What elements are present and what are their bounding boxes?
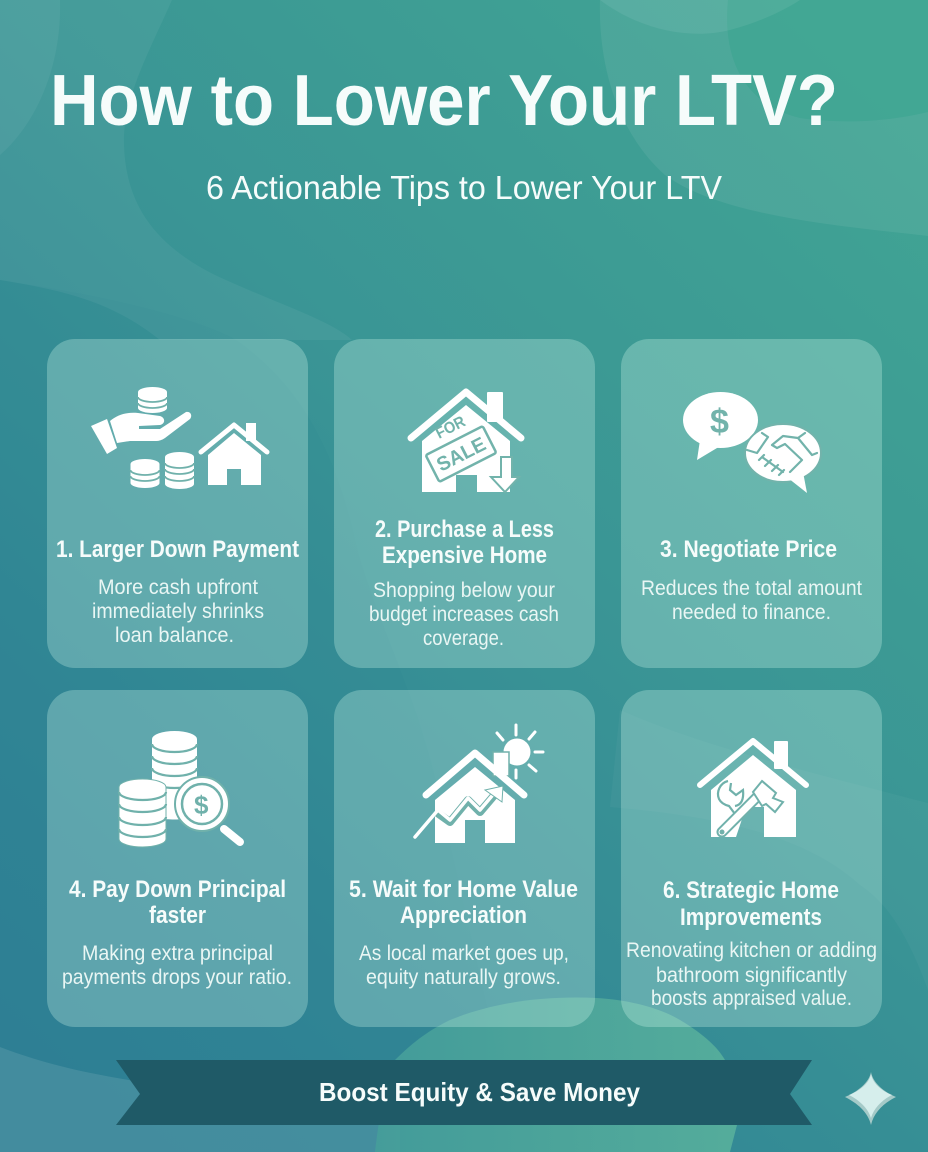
card title: 2. Purchase a Less	[375, 516, 554, 543]
card text: coverage.	[423, 627, 504, 650]
card text: Shopping below your	[373, 579, 555, 602]
card title: Expensive Home	[382, 542, 547, 569]
icon: for sale house with down arrow: FOR	[433, 413, 469, 443]
panel: 6 Strategic Home Improvements	[621, 690, 882, 1027]
card title	[349, 876, 578, 929]
card text: As local market goes up,	[359, 942, 569, 965]
icon: house with wrench and hammer	[700, 741, 806, 837]
card text: loan balance.	[115, 624, 234, 647]
card title: 1. Larger Down Payment	[56, 536, 299, 563]
card title: 4. Pay Down Principal	[69, 876, 286, 903]
icon: coin stacks with magnifier: $	[194, 790, 209, 820]
card text: Making extra principal	[82, 942, 273, 965]
card title: Appreciation	[400, 902, 527, 929]
card title: 6. Strategic Home	[663, 877, 839, 904]
icon: coin stacks with magnifier	[119, 731, 240, 847]
panel: 3 Negotiate Price	[621, 339, 882, 668]
banner text: Boost Equity & Save Money	[319, 1077, 641, 1107]
card text: More cash upfront	[98, 576, 258, 599]
card title: 5. Wait for Home Value	[349, 876, 578, 903]
panel: 4 Pay Down Principal faster	[47, 690, 308, 1027]
icon: hand, coins and house	[91, 387, 267, 489]
card text	[626, 939, 877, 1010]
card text: Renovating kitchen or adding	[626, 939, 877, 962]
card text: payments drops your ratio.	[62, 966, 292, 989]
title: How to Lower Your LTV?	[50, 61, 838, 141]
card text	[369, 579, 559, 650]
panel: 1 Larger Down Payment	[47, 339, 308, 668]
banner	[116, 1060, 812, 1125]
card text: needed to finance.	[672, 601, 831, 624]
card title: faster	[149, 902, 206, 929]
card text: equity naturally grows.	[366, 966, 561, 989]
panel: 5 Wait for Home Value Appreciation	[334, 690, 595, 1027]
card text	[62, 942, 292, 989]
card text	[359, 942, 569, 989]
card text	[92, 576, 264, 647]
icon: sparkle star	[845, 1072, 896, 1125]
card title	[663, 877, 839, 931]
card text: Reduces the total amount	[641, 577, 862, 600]
card text: immediately shrinks	[92, 600, 264, 623]
subtitle: 6 Actionable Tips to Lower Your LTV	[206, 169, 722, 206]
icon: for sale house with down arrow	[411, 392, 521, 492]
card text	[641, 577, 862, 624]
icon: speech bubbles with dollar and handshake	[683, 392, 821, 493]
card text: boosts appraised value.	[651, 987, 852, 1010]
card text: bathroom significantly	[656, 964, 847, 987]
icon: speech bubbles with dollar and handshake: $	[710, 403, 729, 441]
icon: house with rising chart and sun	[415, 725, 543, 843]
card title: 3. Negotiate Price	[660, 536, 837, 563]
card title	[69, 876, 286, 929]
icon: for sale house with down arrow: SALE	[433, 433, 490, 476]
card text: budget increases cash	[369, 603, 559, 626]
panel: 2 Purchase a Less Expensive Home	[334, 339, 595, 668]
card title: Improvements	[680, 904, 822, 931]
card title	[375, 516, 554, 569]
